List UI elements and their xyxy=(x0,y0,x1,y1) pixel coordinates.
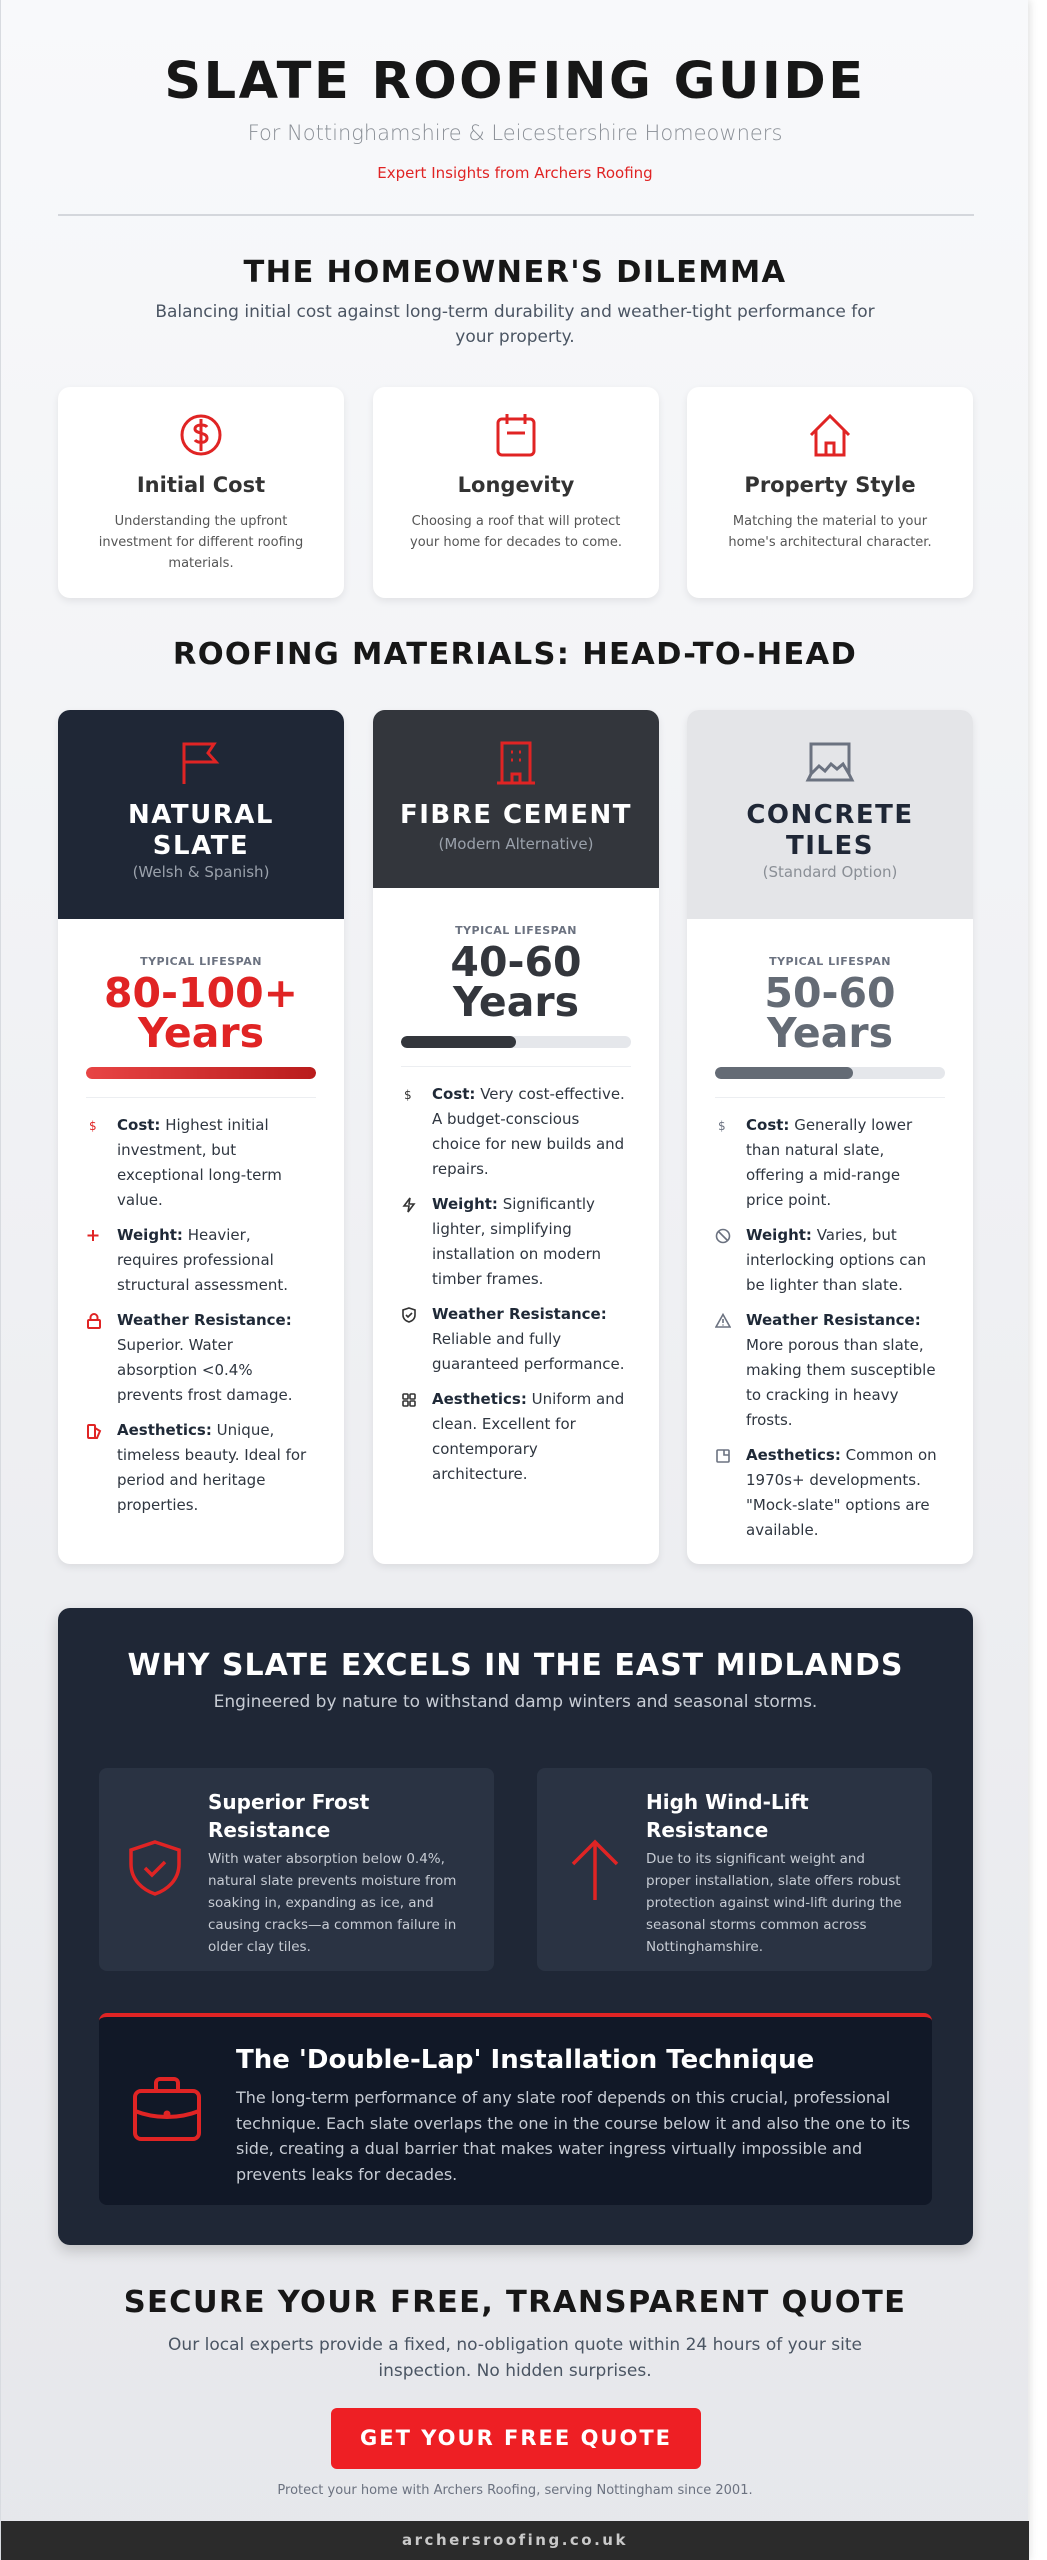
panel: natural slate: Aesthetics: Unique, timeless beauty. Ideal for period and heritage properties. xyxy=(117,1421,306,1514)
dilemma description: Balancing initial cost against long-term durability and weather-tight performance for your property. xyxy=(155,302,875,347)
heading: head-to-head: ROOFING MATERIALS: HEAD-TO-HEAD xyxy=(173,637,857,672)
header: fibre cement: FIBRE CEMENT xyxy=(400,800,632,830)
panel: longevity: Choosing a roof that will protect your home for decades to come. xyxy=(410,514,622,550)
subtitle: For Nottinghamshire & Leicestershire Homeowners xyxy=(248,121,782,145)
panel: natural slate: TYPICAL LIFESPAN xyxy=(140,955,262,968)
panel: initial cost: Understanding the upfront investment for different roofing materials. xyxy=(99,514,303,571)
heading: dilemma: THE HOMEOWNER'S DILEMMA xyxy=(244,255,786,290)
lifespan: 80-100+: 80-100+ xyxy=(104,969,298,1017)
panel: natural slate: Cost: Highest initial investment, but exceptional long-term value. xyxy=(117,1116,282,1209)
panel: longevity xyxy=(373,387,659,598)
panel: why slate excels xyxy=(58,1608,973,2245)
panel: concrete tiles: Weight: Varies, but interlocking options can be lighter than slate. xyxy=(746,1226,926,1294)
panel: concrete tiles: Cost: Generally lower than natural slate, offering a mid-range price point. xyxy=(746,1116,912,1209)
title: SLATE ROOFING GUIDE xyxy=(164,52,866,111)
panel: property style: Property Style xyxy=(744,473,916,497)
header: concrete tiles xyxy=(687,710,973,919)
lifespan: 80-100+: Years xyxy=(138,1009,264,1057)
icon: up arrow xyxy=(572,1840,618,1900)
header: fibre cement xyxy=(373,710,659,888)
panel: initial cost xyxy=(58,387,344,598)
feature: frost resistance xyxy=(99,1768,494,1971)
icon: house xyxy=(810,414,850,456)
panel: property style: Matching the material to your home's architectural character. xyxy=(728,514,932,550)
panel: fibre cement: Weather Resistance: Reliable and fully guaranteed performance. xyxy=(432,1305,625,1373)
header: natural slate xyxy=(58,710,344,919)
feature: wind-lift: High Wind-Lift Resistance xyxy=(646,1790,809,1842)
panel: natural slate: Weight: Heavier, requires professional structural assessment. xyxy=(117,1226,288,1294)
panel: fibre cement: TYPICAL LIFESPAN xyxy=(455,924,577,937)
lifespan: 40-60: Years xyxy=(453,978,579,1026)
heading: why slate: WHY SLATE EXCELS IN THE EAST MIDLANDS xyxy=(128,1648,903,1683)
lifespan: 50-60 xyxy=(764,969,896,1057)
callout: double-lap xyxy=(99,2013,932,2205)
footer: archersroofing.co.uk xyxy=(402,2531,628,2549)
footer xyxy=(1,2521,1029,2560)
button: get quote xyxy=(331,2408,701,2469)
heading: quote: SECURE YOUR FREE, TRANSPARENT QUOTE xyxy=(124,2285,906,2320)
icon: calendar xyxy=(496,414,536,456)
panel: fibre cement: Aesthetics: Uniform and clean. Excellent for contemporary architecture. xyxy=(432,1390,624,1483)
panel: concrete tiles xyxy=(687,710,973,1564)
panel: concrete tiles: Aesthetics: Common on 1970s+ developments. "Mock-slate" options are available. xyxy=(746,1446,937,1539)
footnote: Protect your home with Archers Roofing, serving Nottingham since 2001. xyxy=(277,2483,753,2498)
panel: natural slate: Weather Resistance: Superior. Water absorption <0.4% prevents frost damage. xyxy=(117,1311,292,1404)
icon: briefcase xyxy=(133,2077,201,2141)
panel: fibre cement xyxy=(373,710,659,1564)
header: fibre cement: (Modern Alternative) xyxy=(438,835,594,853)
icon: shield check xyxy=(129,1840,181,1896)
icon: dollar coin xyxy=(180,414,222,456)
panel: fibre cement: Weight: Significantly lighter, simplifying installation on modern timber frames. xyxy=(432,1195,601,1288)
panel: natural slate xyxy=(58,710,344,1564)
header: natural slate: NATURAL SLATE xyxy=(128,800,274,861)
tagline: Expert Insights from Archers Roofing xyxy=(377,164,653,182)
callout text: The long-term performance of any slate roof depends on this crucial, professional technique. Each slate overlaps the one in the course below it and also the one to its side, creating a dual barrier that makes water ingress virtually impossible and prevents leaks for decades. xyxy=(236,2088,910,2184)
subheading: Engineered by nature to withstand damp winters and seasonal storms. xyxy=(214,1692,817,1712)
header: concrete tiles: (Standard Option) xyxy=(763,863,897,881)
lifespan: 50-60: 50-60 xyxy=(764,969,896,1017)
feature: wind-lift: Due to its significant weight and proper installation, slate offers robust protection against wind-lift during the seasonal storms common across Nottinghamshire. xyxy=(646,1851,902,1955)
feature: frost resistance: With water absorption below 0.4%, natural slate prevents moisture from soaking in, expanding as ice, and causing cracks—a common failure in older clay tiles. xyxy=(208,1851,456,1955)
lifespan: 40-60: 40-60 xyxy=(450,938,582,986)
feature: frost resistance: Superior Frost Resistance xyxy=(208,1790,369,1842)
header: natural slate: (Welsh & Spanish) xyxy=(133,863,269,881)
panel: longevity: Longevity xyxy=(458,473,574,497)
lifespan: 50-60: Years xyxy=(767,1009,893,1057)
lifespan: 80-100+ xyxy=(104,969,298,1057)
quote description: Our local experts provide a fixed, no-obligation quote within 24 hours of your site inspection. No hidden surprises. xyxy=(168,2335,862,2381)
callout heading: The 'Double-Lap' Installation Technique xyxy=(236,2045,814,2075)
panel: initial cost: Initial Cost xyxy=(137,473,265,497)
panel: property style xyxy=(687,387,973,598)
panel: concrete tiles: TYPICAL LIFESPAN xyxy=(769,955,891,968)
panel: fibre cement: Cost: Very cost-effective. A budget-conscious choice for new builds and repairs. xyxy=(432,1085,625,1178)
feature: wind-lift xyxy=(537,1768,932,1971)
lifespan: 40-60 xyxy=(450,938,582,1026)
button: get quote: GET YOUR FREE QUOTE xyxy=(360,2426,672,2450)
header: concrete tiles: CONCRETE TILES xyxy=(746,800,914,861)
panel: concrete tiles: Weather Resistance: More porous than slate, making them susceptible to cracking in heavy frosts. xyxy=(746,1311,936,1429)
